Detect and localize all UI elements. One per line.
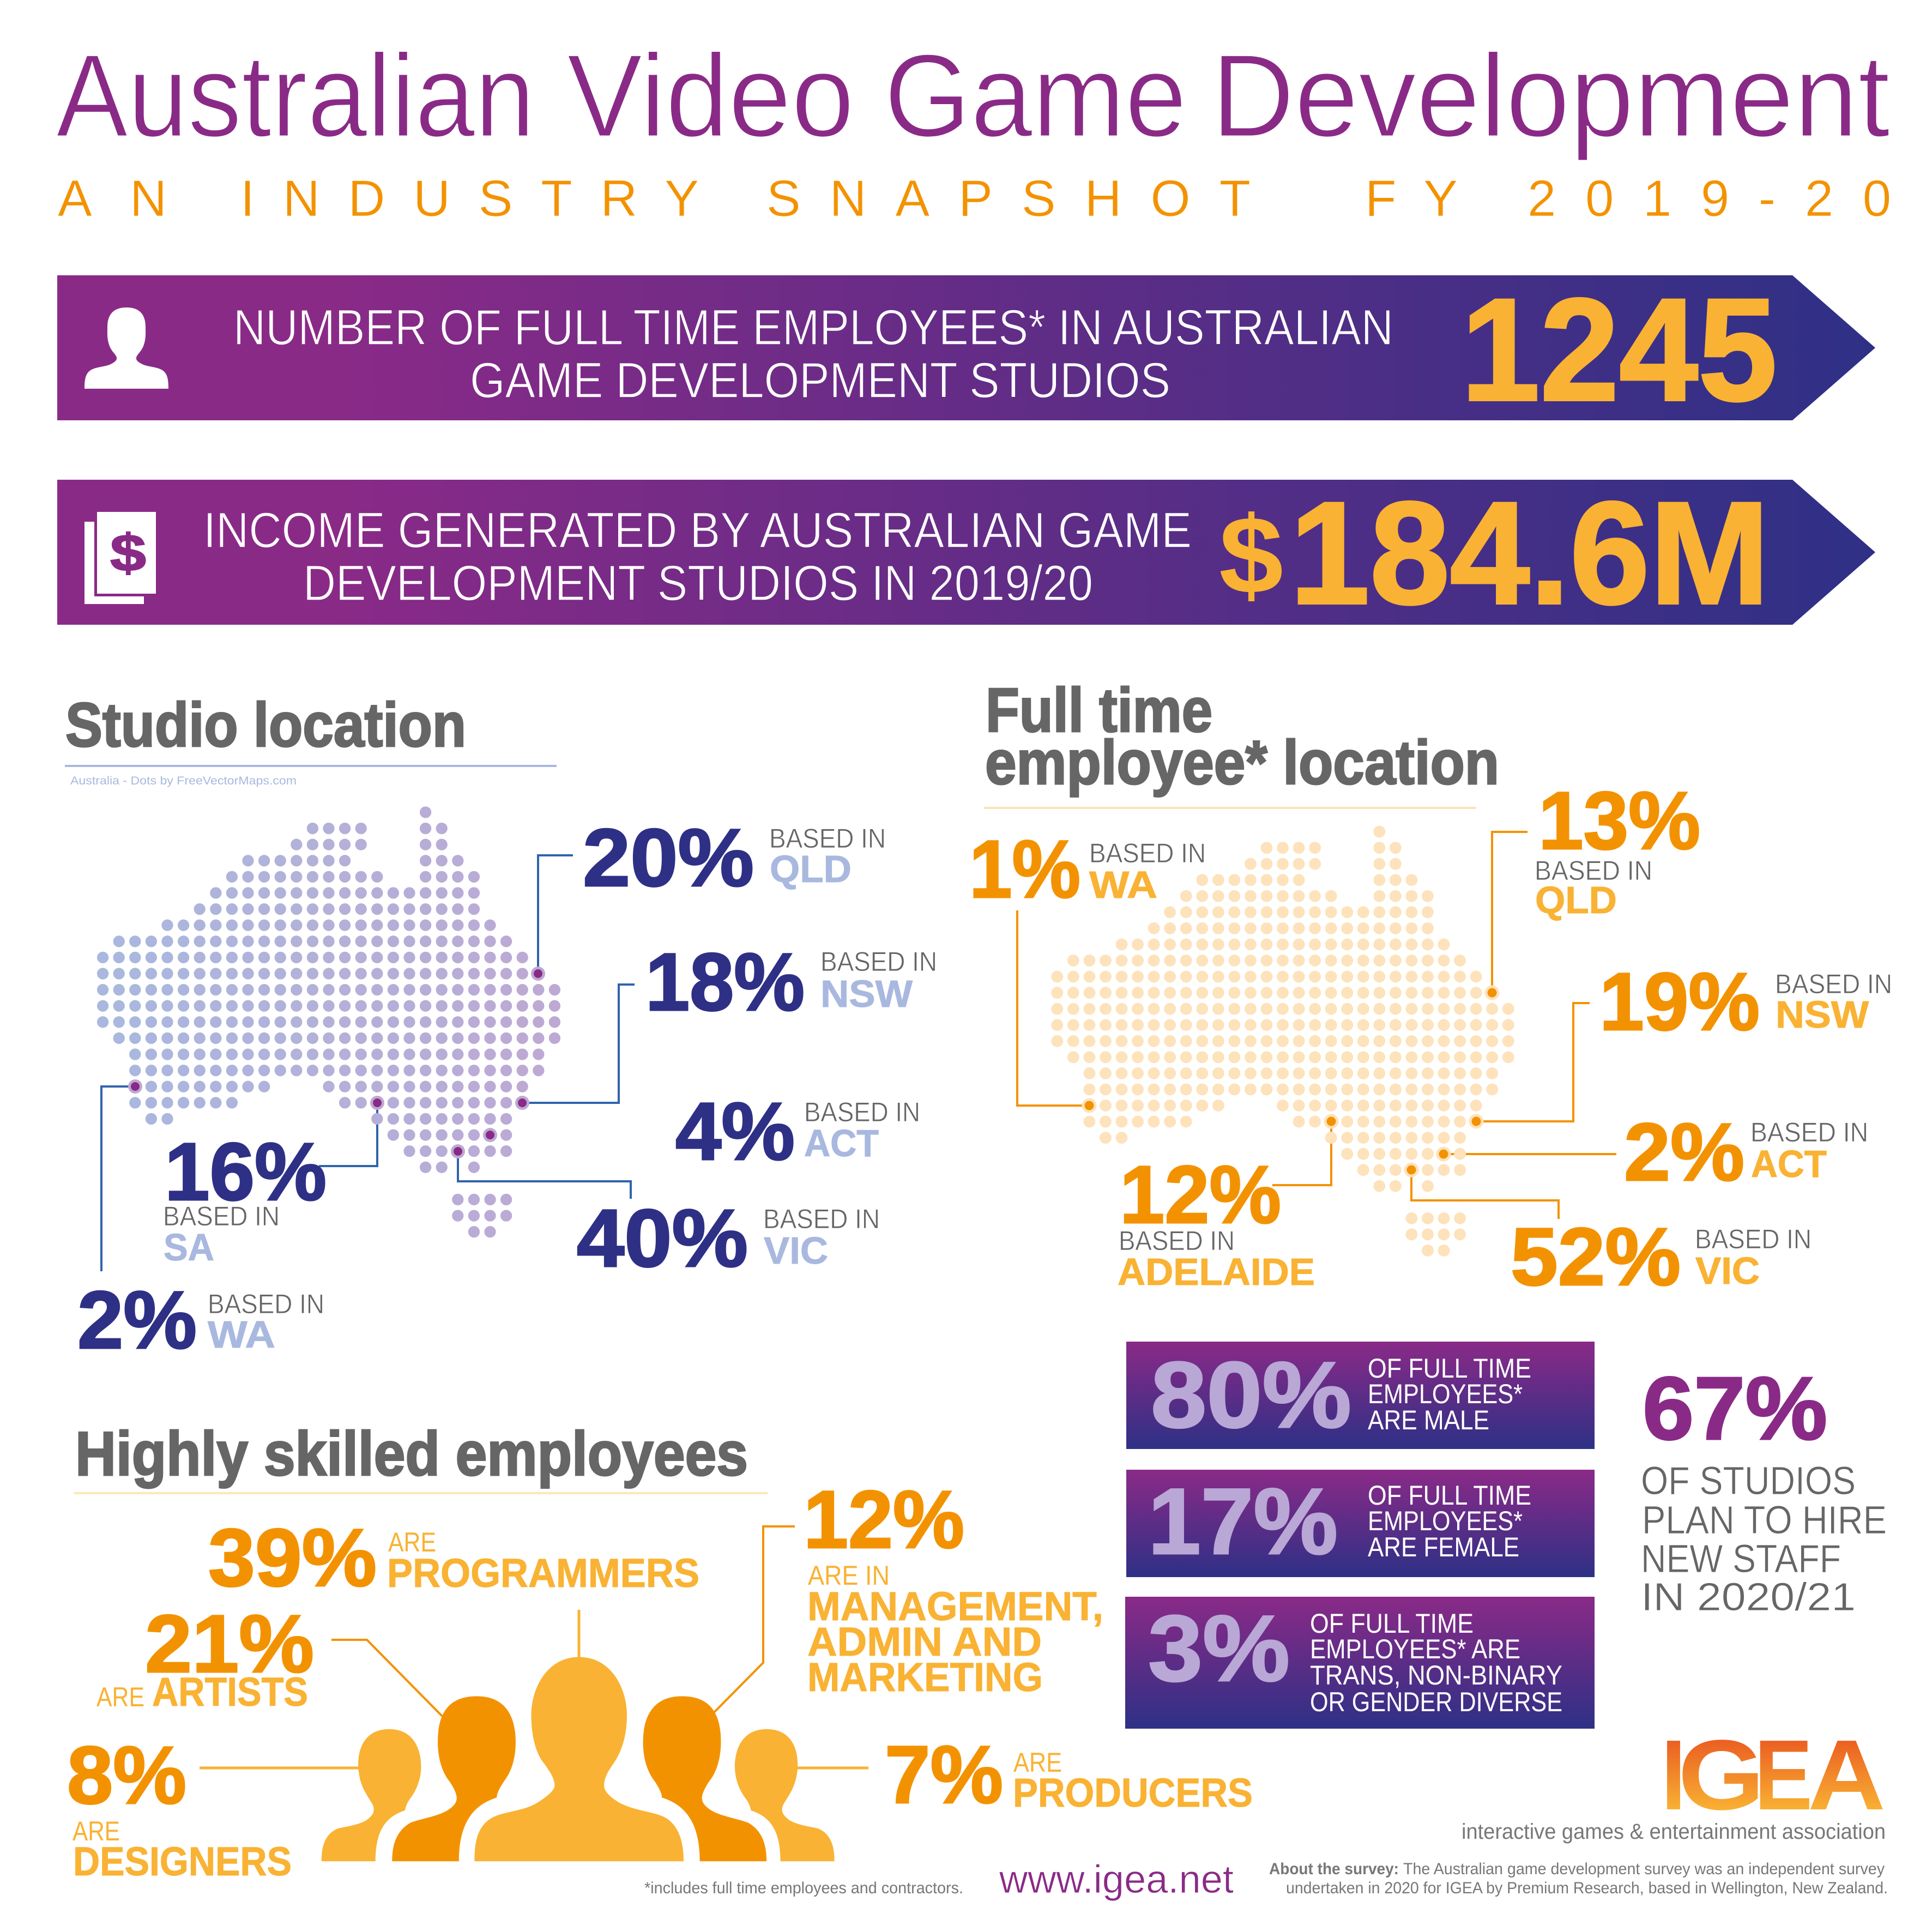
caption: OF FULL TIME xyxy=(1368,1480,1531,1511)
panel: gender male xyxy=(1126,1342,1595,1449)
stat: programmers 39%: 39% xyxy=(208,1512,377,1603)
panel: employees banner xyxy=(57,268,1875,431)
stat: designers 8%: DESIGNERS xyxy=(73,1839,292,1884)
title: Game xyxy=(884,29,1187,161)
figure: 80% xyxy=(1151,1343,1351,1447)
stat: ACT 2%: BASED IN xyxy=(1750,1117,1868,1148)
panel: gender female xyxy=(1126,1469,1595,1577)
stat: SA 16% xyxy=(163,1126,327,1269)
subtitle: FY xyxy=(1365,170,1458,227)
stat: VIC 52% xyxy=(1511,1211,1812,1302)
logo tagline: interactive games & entertainment association xyxy=(1462,1820,1886,1844)
caption: EMPLOYEES* xyxy=(1368,1379,1523,1409)
stat: VIC 40% xyxy=(577,1192,880,1284)
caption xyxy=(1310,1608,1562,1717)
figure: 67%: 67% xyxy=(1643,1359,1827,1458)
stat: artists 21% xyxy=(96,1598,314,1714)
panel: income banner xyxy=(57,471,1875,635)
stat: programmers 39%: ARE xyxy=(388,1527,436,1557)
stat: Adelaide 12%: 12% xyxy=(1120,1149,1281,1240)
caption xyxy=(1368,1353,1531,1435)
banner arrow shape xyxy=(57,480,1875,625)
panel: gender diverse xyxy=(1125,1596,1595,1729)
caption: OF FULL TIME xyxy=(1310,1608,1474,1639)
leader lines xyxy=(101,855,635,1271)
caption xyxy=(1368,1480,1531,1562)
icon: person xyxy=(84,307,168,389)
banner text xyxy=(233,300,1393,408)
logo: IGEA: G xyxy=(1678,1719,1765,1831)
banner text: GAME DEVELOPMENT STUDIOS xyxy=(470,353,1170,408)
about the survey: undertaken in 2020 for IGEA by Premium Research, based in Wellington, New Zealand. xyxy=(1286,1879,1888,1897)
caption: TRANS, NON-BINARY xyxy=(1310,1660,1562,1690)
website: www.igea.net xyxy=(999,1858,1234,1901)
figure: $184.6M: $ xyxy=(1219,493,1283,617)
banner arrow shape xyxy=(57,275,1875,420)
caption: OF STUDIOS xyxy=(1641,1459,1856,1503)
stat: ACT 4% xyxy=(675,1085,920,1177)
logo: IGEA: E xyxy=(1754,1719,1813,1831)
banner text: INCOME GENERATED BY AUSTRALIAN GAME xyxy=(203,503,1192,558)
stat: NSW 18%: NSW xyxy=(820,973,913,1015)
stat: producers 7% xyxy=(885,1729,1253,1820)
stat: artists 21%: 21% xyxy=(145,1598,314,1689)
stat: WA 1%: 1% xyxy=(969,823,1080,915)
panel: highly skilled employees xyxy=(67,1420,1253,1884)
stat: programmers 39% xyxy=(208,1512,699,1603)
banner text: NUMBER OF FULL TIME EMPLOYEES* IN AUSTRALIAN xyxy=(233,300,1393,355)
stat: management 12%: ARE IN xyxy=(808,1560,890,1591)
heading xyxy=(985,676,1499,798)
map credit: Australia - Dots by FreeVectorMaps.com xyxy=(70,775,297,787)
caption: PLAN TO HIRE xyxy=(1642,1499,1887,1542)
leader lines xyxy=(1017,832,1616,1219)
stat: management 12%: ADMIN AND xyxy=(807,1619,1042,1664)
caption: OR GENDER DIVERSE xyxy=(1310,1687,1562,1717)
title: Video xyxy=(567,29,854,161)
caption: IN 2020/21 xyxy=(1641,1575,1856,1619)
stat: ACT 2%: 2% xyxy=(1624,1106,1744,1198)
banner text: DEVELOPMENT STUDIOS IN 2019/20 xyxy=(303,556,1093,611)
logo: IGEA: I xyxy=(1661,1719,1686,1831)
dot map of Australia xyxy=(103,812,555,1232)
stat: NSW 19% xyxy=(1599,956,1892,1047)
heading: Highly skilled employees xyxy=(75,1420,748,1489)
stat: management 12%: MARKETING xyxy=(807,1655,1043,1700)
caption: EMPLOYEES* xyxy=(1368,1506,1523,1536)
banner text xyxy=(203,503,1192,611)
logo: IGEA: A xyxy=(1808,1719,1886,1831)
caption: EMPLOYEES* ARE xyxy=(1310,1634,1520,1664)
title: Australian xyxy=(56,29,535,161)
stat: NSW 19%: 19% xyxy=(1599,956,1760,1047)
stat: ACT 2%: ACT xyxy=(1751,1143,1827,1185)
footnote: *includes full time employees and contractors. xyxy=(644,1879,963,1897)
stat: QLD 13%: BASED IN xyxy=(1535,855,1652,886)
stat: VIC 40%: 40% xyxy=(577,1192,748,1284)
subtitle: AN xyxy=(58,170,167,227)
stat: management 12%: MANAGEMENT, xyxy=(807,1584,1103,1629)
box xyxy=(1125,1597,1595,1729)
stat: NSW 19%: NSW xyxy=(1776,993,1869,1036)
stat: SA 16%: 16% xyxy=(165,1126,327,1217)
logo: IGEA xyxy=(1661,1719,1886,1831)
heading: Studio location xyxy=(65,691,466,760)
stat: designers 8%: ARE xyxy=(73,1816,120,1846)
stat: QLD 13% xyxy=(1535,775,1700,921)
stat: NSW 19%: BASED IN xyxy=(1775,969,1892,999)
stat: ACT 2% xyxy=(1624,1106,1868,1198)
heading: Full time xyxy=(986,676,1212,745)
stat: QLD 20%: BASED IN xyxy=(769,823,886,854)
icon: money: $ xyxy=(110,524,146,582)
stat: ACT 4%: ACT xyxy=(804,1122,879,1164)
panel: hiring plans xyxy=(1641,1359,1887,1619)
stat: management 12% xyxy=(804,1474,1103,1700)
caption: NEW STAFF xyxy=(1641,1537,1841,1581)
stat: QLD 20%: QLD xyxy=(770,848,852,890)
stat: ACT 4%: BASED IN xyxy=(804,1097,920,1127)
stat: NSW 18% xyxy=(645,936,937,1028)
stat: designers 8% xyxy=(67,1729,292,1884)
about the survey: The Australian game development survey was an independent survey xyxy=(1403,1860,1885,1878)
subtitle: 2019-20 xyxy=(1528,170,1891,227)
subtitle xyxy=(58,170,1891,227)
stat: designers 8%: 8% xyxy=(67,1729,186,1821)
box xyxy=(1126,1342,1595,1449)
box xyxy=(1126,1470,1595,1577)
figure: 17% xyxy=(1148,1469,1338,1574)
stat: artists 21%: ARE xyxy=(96,1682,144,1712)
stat: SA 16%: BASED IN xyxy=(163,1201,280,1231)
stat: WA 1%: BASED IN xyxy=(1089,838,1206,868)
about the survey: About the survey: xyxy=(1269,1860,1399,1878)
subtitle: SNAPSHOT xyxy=(766,170,1251,227)
dot map of Australia xyxy=(1057,832,1508,1251)
stat: VIC 52%: BASED IN xyxy=(1695,1224,1812,1254)
stat: QLD 13%: 13% xyxy=(1538,775,1700,866)
heading: employee* location xyxy=(985,728,1499,798)
leader lines xyxy=(200,1526,868,1768)
stat: QLD 20%: 20% xyxy=(583,812,754,903)
stat: WA 1% xyxy=(969,823,1206,915)
figure: 1245: 1245 xyxy=(1461,268,1777,431)
stat: NSW 18%: BASED IN xyxy=(820,946,937,977)
stat: VIC 40%: VIC xyxy=(764,1229,828,1272)
stat: SA 16%: SA xyxy=(164,1226,214,1269)
stat: Adelaide 12%: ADELAIDE xyxy=(1118,1251,1315,1293)
stat: VIC 40%: BASED IN xyxy=(763,1204,880,1234)
caption: ARE MALE xyxy=(1368,1405,1489,1435)
subtitle: INDUSTRY xyxy=(240,170,699,227)
stat: artists 21%: ARTISTS xyxy=(152,1669,308,1714)
title xyxy=(56,29,1890,161)
stat: WA 2%: BASED IN xyxy=(208,1289,324,1319)
icon: group of people xyxy=(322,1657,835,1861)
panel: full time employee location xyxy=(969,676,1892,1302)
caption: ARE FEMALE xyxy=(1368,1532,1519,1562)
figure: $184.6M: 184.6M xyxy=(1290,471,1770,635)
caption: OF FULL TIME xyxy=(1368,1353,1531,1384)
about the survey xyxy=(1269,1860,1888,1897)
stat: producers 7%: ARE xyxy=(1013,1747,1062,1778)
panel: studio location xyxy=(65,691,937,1366)
caption xyxy=(1641,1459,1887,1619)
stat: VIC 52%: VIC xyxy=(1695,1249,1760,1292)
stat: QLD 13%: QLD xyxy=(1535,879,1617,921)
stat: QLD 20% xyxy=(583,812,886,903)
stat: producers 7%: 7% xyxy=(885,1729,1003,1820)
stat: WA 2%: WA xyxy=(208,1313,275,1356)
stat: producers 7%: PRODUCERS xyxy=(1013,1770,1253,1815)
stat: VIC 52%: 52% xyxy=(1511,1211,1681,1302)
figure: 3% xyxy=(1148,1596,1290,1701)
stat: programmers 39%: PROGRAMMERS xyxy=(387,1550,699,1596)
stat: NSW 18%: 18% xyxy=(645,936,805,1028)
stat: WA 1%: WA xyxy=(1089,864,1157,906)
stat: WA 2% xyxy=(77,1274,324,1366)
icon: money xyxy=(84,512,156,604)
title: Development xyxy=(1211,29,1890,161)
stat: Adelaide 12%: BASED IN xyxy=(1119,1225,1235,1256)
stat: WA 2%: 2% xyxy=(77,1274,197,1366)
stat: ACT 4%: 4% xyxy=(675,1085,795,1177)
stat: management 12%: 12% xyxy=(804,1474,964,1565)
stat: Adelaide 12% xyxy=(1118,1149,1315,1293)
